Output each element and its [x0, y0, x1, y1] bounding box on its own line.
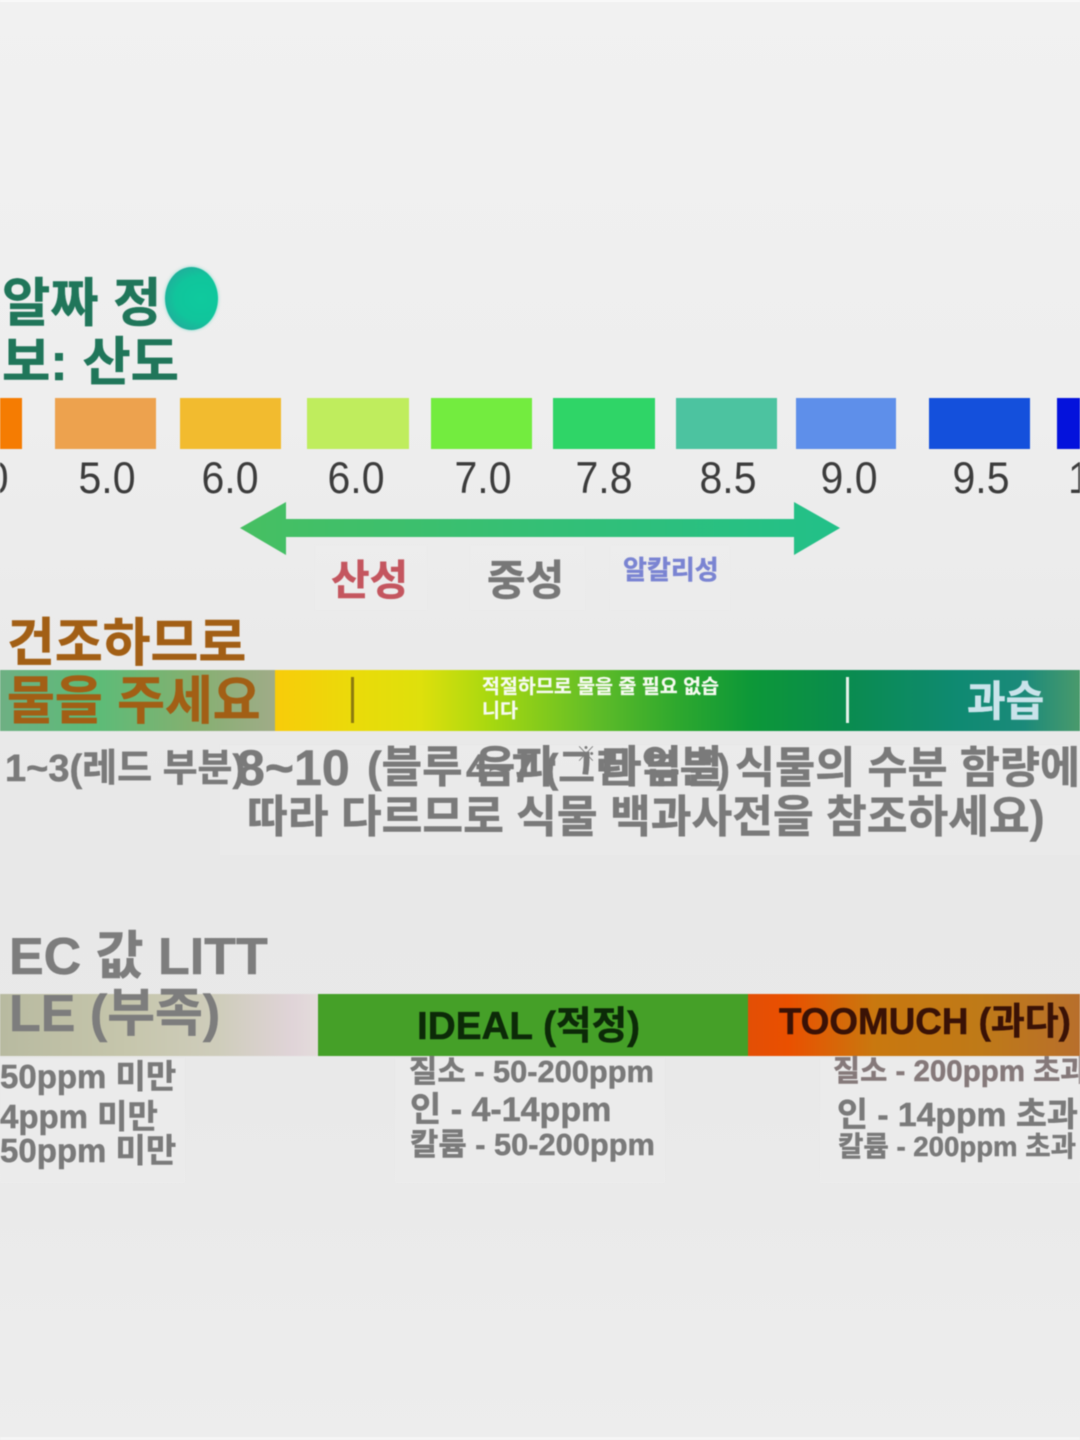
- heading: EC value little: [9, 928, 268, 1043]
- label 5.0: 5.0: [78, 453, 136, 503]
- swatch: orange: [0, 398, 22, 449]
- list: too much values: [833, 1055, 1080, 1163]
- line: nitrogen: 질소 - 200ppm 초과: [833, 1055, 1080, 1088]
- label: too much: TOOMUCH (과다): [779, 1001, 1071, 1042]
- line: phosphorus: 인 - 14ppm 초과: [837, 1096, 1078, 1134]
- swatch 8.5: [676, 398, 777, 449]
- label: adequate moisture: [482, 676, 720, 722]
- tick: dry boundary: [351, 677, 354, 723]
- label 6.0: 6.0: [328, 453, 384, 503]
- label: acidic: 산성: [331, 557, 408, 604]
- title: 알짜 정보: 산도: 보: 산도: [2, 333, 179, 392]
- line: nitrogen: 50ppm 미만: [0, 1058, 176, 1095]
- heading: dry, water it: [7, 615, 261, 731]
- title: 알짜 정보: 산도: 알짜 정: [2, 274, 162, 333]
- list: ideal values: [409, 1054, 655, 1162]
- moisture bar: [0, 669, 1080, 732]
- label: overwet: 과습: [967, 678, 1044, 725]
- title: 알짜 정보: 산도: [2, 274, 179, 392]
- bar segment: little: [0, 994, 318, 1056]
- heading: EC value little: EC 값 LITT: [9, 928, 268, 986]
- heading: dry, water it: 물을 주세요: [7, 673, 261, 731]
- text: second line: 따라 다르므로 식물 백과사전을 참조하세요): [247, 793, 1045, 842]
- bar segment: dry: [0, 670, 275, 731]
- text: green range: 4~7 (그린 부분): [466, 747, 730, 791]
- heading: dry, water it: 건조하므로: [7, 615, 246, 673]
- swatch 6.0 lime: [307, 398, 409, 449]
- label 7.0: 7.0: [454, 453, 512, 503]
- tick: wet boundary: [846, 677, 849, 723]
- bar segment: too much: [748, 994, 1080, 1056]
- swatch 6.0 amber: [180, 398, 281, 449]
- swatch 7.8: [553, 398, 655, 449]
- text: note mark: ※: [576, 744, 596, 766]
- pH colour scale: [0, 397, 1080, 503]
- swatch 9.5: [929, 398, 1030, 449]
- list: little values: [0, 1058, 176, 1170]
- line: nitrogen: 질소 - 50-200ppm: [409, 1054, 654, 1089]
- label 6.0: 6.0: [202, 453, 258, 503]
- label 9.5: 9.5: [952, 453, 1010, 503]
- label 8.5: 8.5: [700, 453, 756, 503]
- text: blue: (블루 음파: [367, 743, 556, 792]
- EC bar: [0, 993, 1080, 1057]
- label: alkaline: 알칼리성: [623, 555, 719, 585]
- text: 8~10: 8~10: [237, 740, 350, 796]
- label: neutral: 중성: [487, 557, 564, 604]
- swatch 9.0: [796, 398, 896, 449]
- swatch 10: [1057, 398, 1080, 449]
- label: adequate moisture: 니다: [482, 700, 518, 722]
- line: phosphorus: 4ppm 미만: [0, 1098, 158, 1135]
- swatch 5.0: [55, 398, 156, 449]
- label: ideal: IDEAL (적정): [417, 1005, 640, 1048]
- line: potassium: 50ppm 미만: [0, 1132, 176, 1169]
- label 7.8: 7.8: [576, 453, 632, 503]
- icon: teal dot: [165, 267, 218, 330]
- label 9.0: 9.0: [820, 453, 878, 503]
- line: phosphorus: 인 - 4-14ppm: [410, 1091, 611, 1129]
- swatch 7.0: [431, 398, 532, 449]
- text: blue range with note: [237, 740, 1080, 842]
- text: red range: 1~3(레드 부분): [5, 748, 245, 790]
- text: type: 타입별: [601, 743, 722, 792]
- bar segment: gradient meter: [275, 670, 1080, 731]
- bar segment: ideal: [318, 994, 748, 1056]
- text: plant moisture: 식물의 수분 함량에: [735, 745, 1080, 793]
- line: potassium: 칼륨 - 50-200ppm: [410, 1127, 655, 1162]
- arrow: acid to alkaline double arrow: [240, 502, 840, 556]
- line: potassium: 칼륨 - 200ppm 초과: [838, 1131, 1076, 1162]
- heading: EC value little: LE (부족): [9, 985, 220, 1043]
- label: adequate moisture: 적절하므로 물을 줄 필요 없습: [482, 676, 719, 698]
